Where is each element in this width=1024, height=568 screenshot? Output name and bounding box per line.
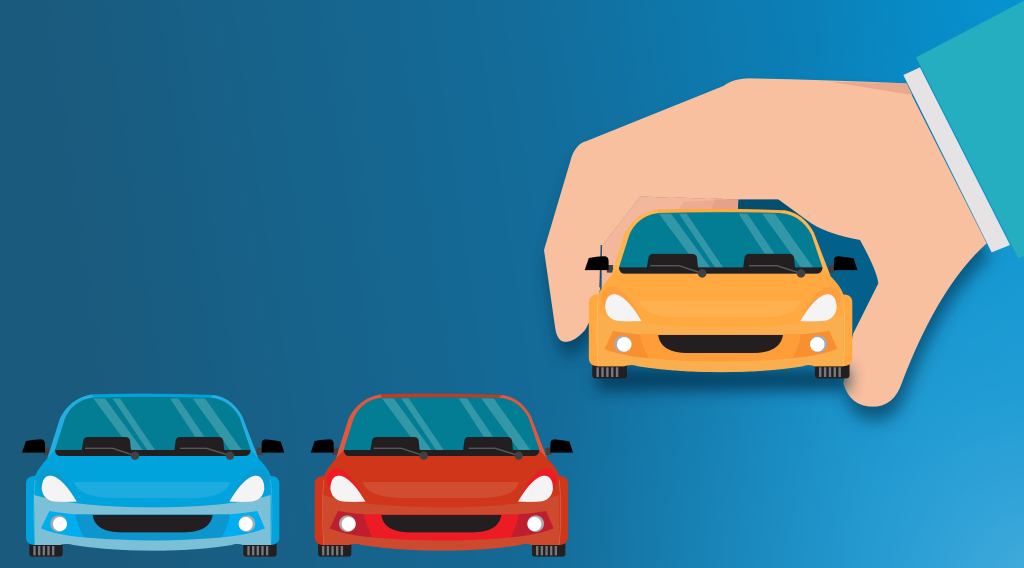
windshield (619, 212, 822, 274)
wipers (650, 266, 805, 278)
shirt cuff (903, 67, 1010, 252)
mirrors (22, 439, 284, 455)
windshield (55, 397, 251, 456)
fog lights (50, 515, 255, 532)
blue car (22, 394, 284, 557)
hood highlight (639, 301, 801, 317)
body edge highlights (34, 480, 272, 545)
lower grille area (41, 511, 265, 540)
roof pillar highlights (336, 394, 547, 458)
mirrors (585, 256, 858, 273)
body (315, 394, 568, 551)
lower grille area (604, 331, 837, 361)
red car (311, 394, 573, 557)
hood highlight (74, 482, 230, 498)
roof pillar highlights (611, 210, 830, 276)
body (26, 394, 279, 551)
shadow of hand and gap behind fingers (547, 92, 989, 421)
headlights (326, 468, 557, 502)
roof pillar highlights (47, 394, 258, 458)
car shadow (596, 368, 850, 390)
wrist shading (830, 82, 912, 95)
bumper panel (323, 495, 559, 551)
hand (544, 78, 987, 407)
orange car held by the hand (585, 209, 858, 390)
body edge highlights (323, 480, 561, 545)
inner finger (602, 197, 738, 290)
wheels (29, 540, 277, 557)
finger gap line (600, 245, 601, 287)
jacket sleeve (916, 1, 1024, 258)
wipers (85, 448, 234, 460)
wheels (592, 361, 850, 378)
fog lights (339, 515, 544, 532)
body edge highlights (597, 299, 845, 366)
mirrors (311, 439, 573, 455)
wheels (318, 540, 565, 557)
fog lights (614, 335, 827, 353)
wipers (374, 448, 523, 460)
headlights (601, 286, 841, 321)
lower grille area (330, 511, 554, 540)
headlights (38, 468, 268, 502)
hand with sleeve (544, 1, 1024, 421)
windshield (344, 397, 539, 456)
hood highlight (363, 482, 519, 498)
finger shading (677, 199, 738, 213)
bumper panel (597, 314, 843, 372)
bumper panel (34, 495, 271, 551)
body (589, 209, 852, 372)
